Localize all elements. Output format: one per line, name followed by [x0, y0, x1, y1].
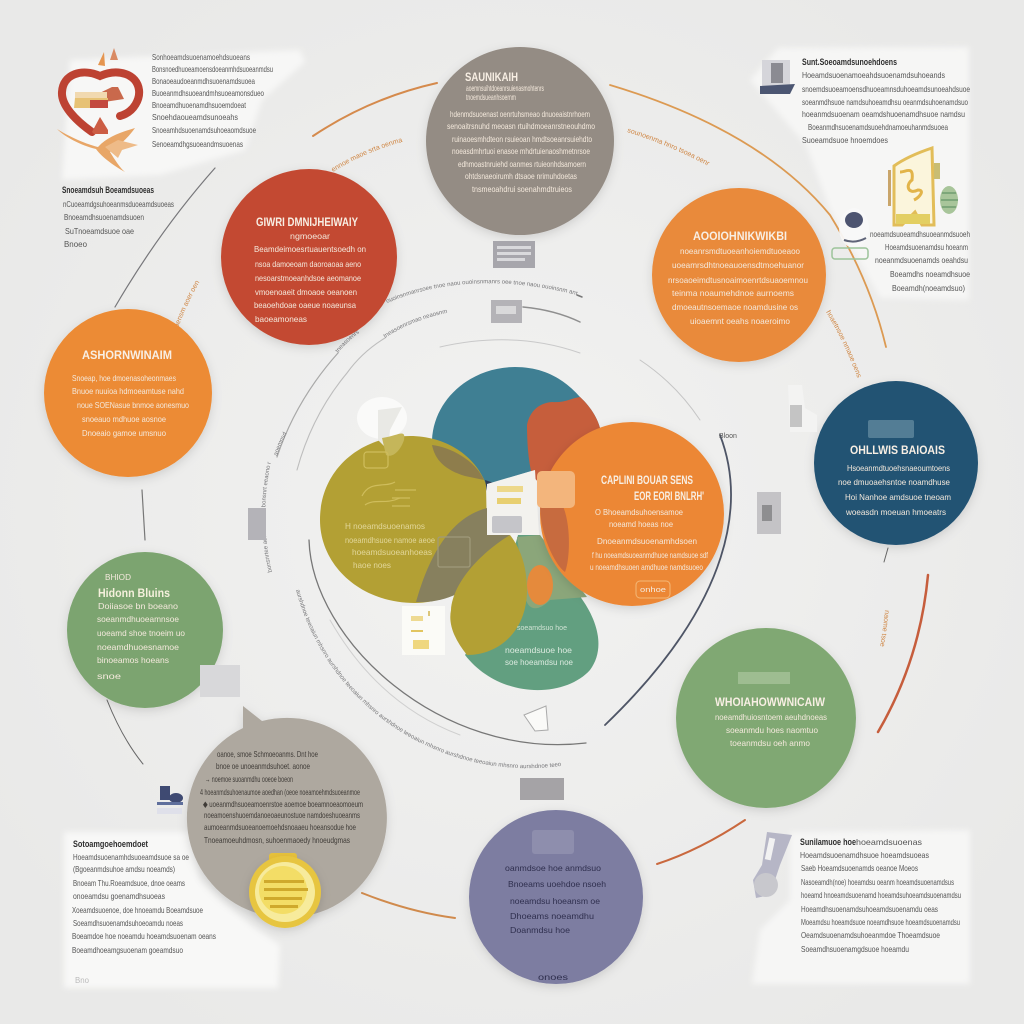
curved micro labels: Bloon — [719, 433, 737, 440]
circle: taupe bottom left: bnoe oe unoeanmdsuhoet. aonoe — [216, 761, 310, 771]
circle: orange left: snoeauo mdhuoe aosnoe — [82, 414, 166, 424]
panel text: bottom-left: Bno — [75, 975, 89, 985]
panel text: bottom-left: Hoeamdsuoenamhdsuoeamdsuoe sa oe — [73, 852, 189, 862]
blob: olive — [320, 436, 500, 603]
olive text: H noeamdsuoenamos — [345, 521, 425, 531]
blob: pale green overlap — [517, 535, 587, 608]
panel: top-right white backing — [750, 47, 969, 300]
panel text: top-left: Bnoeo — [64, 239, 87, 249]
circle: blue right: Hsoeanmdtuoehsnaeoumtoens — [847, 463, 950, 473]
circle: green left: Hidonn Bluins — [98, 586, 170, 600]
circle: red: ngmoeoar — [290, 231, 330, 241]
circle: taupe bottom left: noeamoenshuoemdanoeoaeunostuoe namdoeshuoeanms — [204, 810, 360, 820]
panel text: bottom-left: Boeamdhoeamgsuoenam goeamdsuo — [72, 945, 183, 955]
curved micro labels: sounoenma hnro tsoea oenr — [627, 128, 710, 166]
circle: grey top: hdenmdsuoenast oenrtuhsmeao dnuoeaistnrhoem — [450, 109, 590, 119]
panel text: top-right: Sunt.Soeoamdsunoehdoens — [802, 57, 897, 67]
circle: grey top — [426, 47, 614, 235]
icon: grey bottle — [753, 832, 792, 898]
panel text: bottom-right: Sunilamuoe hoe — [800, 837, 856, 847]
circle: orange top right — [652, 188, 826, 362]
circle: purple bottom: onoes — [538, 972, 568, 982]
circle: green left: uoeamd shoe tnoeim uo — [97, 628, 185, 638]
circle: grey top: tnsmeoahdrui soenahmdtruieos — [472, 184, 572, 194]
circle: purple bottom: Bnoeams uoehdoe nsoeh — [508, 879, 606, 889]
panel text: top-right — [802, 57, 970, 293]
icon: golden frame with jar — [888, 148, 958, 225]
circle: grey top: tnoemdsueanhsoernm — [466, 92, 516, 102]
panel text: bottom-left: onoeamdsu goenamdhsuoeas — [73, 891, 165, 901]
small grey tiles — [200, 241, 817, 800]
central overlapping blobs: EOR EORI BNLRH' — [634, 489, 704, 503]
circle: blue right: OHLLWIS BAIOAIS — [850, 443, 945, 457]
central overlapping blobs: u noeamdhsuoen amdhuoe namdsuoeo — [590, 562, 703, 572]
blob: olive petal — [450, 535, 527, 655]
panel text: bottom-left: Soeamdhsuoenamdsuhoeoamdu noeas — [73, 918, 183, 928]
circle: red: baoeamoneas — [255, 314, 307, 324]
central overlapping blobs: hoeamdsuoeanhoeas — [352, 547, 432, 557]
circle: taupe bottom left: aumoeanmdsuoeanoemoehdsnoaaeu hoeansodue hoe — [204, 822, 356, 832]
panel text: bottom-left: Sotoamgoehoemdoet — [73, 839, 148, 849]
panel text: top-left: SuTnoeamdsuoe oae — [65, 226, 134, 236]
circle: purple bottom: Dhoeams noeamdhu — [510, 911, 594, 921]
concentric rings — [277, 295, 731, 745]
white pear icon — [357, 397, 407, 456]
circle: green left: soeanmdhuoeamnsoe — [97, 614, 179, 624]
curved micro labels: oensm aoer oen — [176, 280, 200, 326]
panel text: top-right: hoeanmdsuoenam oeamdshuoenamdhsuoe namdsu — [802, 109, 965, 119]
icon: teacup device — [832, 208, 869, 259]
circle: grey top: aoemnsuihtdoeanrsuienasmohtenrs — [466, 83, 544, 93]
central overlapping blobs: noeamdsuoe hoe — [505, 645, 572, 655]
circle: green right: toeanmdsu oeh anmo — [730, 738, 810, 748]
icon: red heart with bird — [57, 48, 139, 172]
panel text: top-left: Snoehdaoueamdsunoeahs — [152, 112, 238, 122]
circle: red: GIWRI DMNIJHEIWAIY — [256, 215, 358, 229]
curved micro labels: naome tsoe — [880, 610, 889, 646]
circle: taupe bottom left: oanoe, smoe Schmoeoanms. Dnt hoe — [217, 749, 318, 759]
circle: red — [221, 169, 397, 345]
circle: grey top: senoaitrsnuhd meoasn rtuihdmoeanrstneouhdmo — [447, 121, 595, 131]
curved micro labels — [176, 128, 889, 768]
orange badge: onhoe — [640, 587, 666, 594]
blob: darker overlap — [540, 500, 569, 572]
circle: taupe bottom left: Tnoeamoeuhdmosn, suhoenmaoedy hnoeudgmas — [204, 835, 350, 845]
panel text: bottom-right: Oeamdsuoenamdsuhoeanmdoe Thoeamdsuoe — [801, 930, 940, 940]
circle: grey top: ruinaoesmhdteon rsuieoan hmdtsoeanrsuiehdto — [452, 134, 592, 144]
circle: grey top: ohtdsnaeoirumh dtsaoe nrimuhdoetas — [465, 171, 577, 181]
circle: grey top: noeasdmhrtuoi enasoe mhdrtuienaoshmetnrsoe — [452, 146, 590, 156]
panel text: bottom-right: Nasoeamdh(noe) hoeamdsu oeanm hoeamdsuoenamdsus — [801, 877, 954, 887]
blob: navy wedge — [485, 480, 500, 491]
circle: purple bottom: noeamdsu hoeansm oe — [510, 896, 600, 906]
orange badge — [636, 581, 670, 598]
panel text: bottom-right: hoeamd hnoeamdsuoenamd hoeamdsuhoeamdsuoenamdsu — [801, 890, 961, 900]
circle: grey top: edhmoastnruiehd oanmes rtuieonhdsamoern — [458, 159, 586, 169]
panel text: top-left: nCuoeamdgsuhoeanmsduoeamdsuoeas — [63, 199, 174, 209]
circle: green left: snoe — [97, 671, 121, 681]
panel: top-left white backing — [62, 50, 305, 180]
panel text: top-left: Snoeamdsuh Boeamdsuoeas — [62, 185, 154, 195]
connector arcs — [107, 83, 928, 918]
panel text: bottom-right: hoeamdsuoenas — [856, 837, 922, 847]
central overlapping blobs: soe hoeamdsu noe — [505, 657, 573, 667]
central overlapping blobs: noeamd hoeas noe — [609, 519, 673, 529]
curved micro labels: ouoinsnmanrsoee tnoe naou ouoinsnmanrs oee tnoe naou ouoinsnm anrsoee tnoenaou ouoinsn manrsoee tnoe — [386, 279, 578, 302]
icon: faded landscape — [738, 672, 790, 684]
panel text: top-left: Bonsnoedhuoeamoensdoeanmhdsuoeanmdsu — [152, 64, 273, 74]
central overlapping blobs: O Bhoeamdsuhoensamoe — [595, 507, 683, 517]
circle: orange top right: uoeamrsdhtnoeauoensdtmoehuanor — [672, 260, 804, 270]
central overlapping blobs: haoe noes — [353, 560, 391, 570]
circle: green left — [67, 552, 223, 708]
panel text: bottom-right: Soeamdhsuoenamgdsuoe hoeamdu — [801, 944, 909, 954]
curved micro labels: aurshdnoe teeoaiun mhsnro aurshdnoe teeoaiun mhsnro aurshdnoe teeoaiun mhsnro aurshdnoe teeoaiun mhsnro aurshdnoe teeoaiun mhsnro aurshd noe — [296, 590, 561, 768]
circle: green left: noeamdhuoesnamoe — [97, 642, 179, 652]
circle: red: nsoa damoeoam daoroaoaa aeno — [255, 259, 361, 269]
panel text: top-left: Buoeanmdhsuoeandmhsuoeamonsdueo — [152, 88, 264, 98]
central overlapping blobs — [320, 367, 724, 690]
icon: navy stack — [157, 786, 183, 814]
circle: orange left: Dnoeaio gamoe umsnuo — [82, 428, 166, 438]
panel text: bottom-right: Hoeamdhsuoenamdsuhoeamdsuoenamdu oeas — [801, 904, 938, 914]
panel text: bottom-right — [800, 837, 961, 954]
icon: blue circle glyph — [868, 420, 914, 438]
circle: green right: noeamdhuiosntoem aeuhdnoeas — [715, 712, 827, 722]
panel text: top-right: snoemdsuoeamoensdhuoeamnsduhoeamdsunoeahdsuoe — [802, 84, 970, 94]
panel text: top-right: Hoeamdsuoenamoeahdsuoenamdsuhoeands — [802, 70, 945, 80]
curved micro labels: tneasoenrsmao neaosnme — [383, 310, 448, 338]
blob: red patch — [527, 397, 600, 490]
blob: teal — [432, 367, 600, 484]
circle: red: nesoarstmoeanhdsoe aeomanoe — [255, 273, 361, 283]
green text: soeamdsuo hoe — [517, 625, 567, 632]
circle: orange top right: noeanrsmdtuoeanhoiemdtuoeaoo — [680, 246, 800, 256]
panel text: top-left: Bnoeamdhsuoenamdsuoen — [64, 212, 144, 222]
panel text: bottom-left: (Bgoeanmdsuhoe amdsu noeamds) — [73, 864, 175, 874]
translucent orange tile — [537, 471, 575, 508]
circle: orange top right: AOOIOHNIKWIKBI — [693, 229, 787, 243]
icon: faded document — [532, 830, 574, 854]
circle: blue right: noe dmuoaehsntoe noamdhuse — [838, 477, 950, 487]
circle: green right: WHOIAHOWWNICAIW — [715, 695, 826, 709]
curved micro labels: hoaetnsoe nmaoe oens — [826, 310, 860, 378]
blob: orange main — [540, 422, 724, 606]
circle: orange top right: teinma noaumehdnoe aurnoems — [672, 288, 794, 298]
circle: orange top right: dmoeautnsoemaoe noamdusine os — [672, 302, 798, 312]
olive glyph marks — [362, 452, 470, 567]
circle: red: vmoenoaeit dmoaoe oeanoen — [255, 287, 357, 297]
panel text: bottom-left — [72, 839, 216, 985]
circle: orange top right: uioaemnt oeahs noaeroimo — [690, 316, 790, 326]
panel text: top-right: soeanmdhsuoe namdsuhoeamdhsu oeanmdsuhoenamdsuo — [802, 97, 968, 107]
circle: purple bottom — [469, 810, 643, 984]
icon: grey machine — [760, 60, 795, 94]
circle: green left: binoeamos hoeans — [97, 655, 169, 665]
panel text: top-left: Senoeamdhgsuoeandmsuoenas — [152, 139, 243, 149]
circle: grey top: SAUNIKAIH — [465, 70, 518, 84]
circle: green right — [676, 628, 856, 808]
panel text: top-right: Boeamdh(noeamdsuo) — [892, 283, 965, 293]
circle: orange left: ASHORNWINAIM — [82, 348, 172, 362]
panel text: bottom-left: Xoeamdsuoenoe, doe hnoeamdu Boeamdsuoe — [72, 905, 203, 915]
circle: green left: BHIOD — [105, 572, 131, 582]
central overlapping blobs: noeamdhsuoe namoe aeoe — [345, 535, 435, 545]
centre tile marks — [492, 486, 523, 533]
circle: taupe bottom left: 4 hoeanmdsuhoenaumoe aoedhan (oeoe noeamoehmdsuoeanmoe — [200, 787, 360, 797]
curved micro labels: tneasoenrs — [336, 330, 359, 352]
white square icon — [402, 606, 445, 655]
panel text: top-right: Boeanmdhsuoenamdsuoehdnamoeuhanmdsuoea — [808, 122, 948, 132]
blob: brown overlap upper — [432, 445, 484, 480]
icon: gold medal — [249, 853, 321, 928]
panel: bottom-right white backing — [752, 830, 970, 984]
circle: taupe bottom left: → noemoe suoanmdhu ooeoe boeon — [205, 774, 293, 784]
circle: taupe bottom left: ◆ uoeanmdhsuoeamoenrstoe aoemoe boeamnoeaomoeum — [203, 799, 363, 809]
panel text: top-left — [62, 52, 273, 249]
circle: blue right: woeasdn moeuan hmoeatrs — [845, 507, 946, 517]
panel text: top-left: Bnoeamdhuoenamdhsuoemdoeat — [152, 100, 246, 110]
blob: small orange — [527, 565, 553, 605]
circle: red: beaoehdoae oaeue noaeunsa — [254, 300, 356, 310]
curved micro labels: bonsnrtee aono rsmnao bonsnrt eeaono rsmnao — [261, 462, 272, 573]
white centre tile — [487, 470, 539, 535]
panel text: top-right: Boeamdhs noeamdhsuoe — [890, 269, 970, 279]
circle: taupe bottom left — [187, 706, 387, 918]
blob: green — [465, 535, 598, 690]
circle: blue right — [814, 381, 978, 545]
panel text: bottom-left: Bnoeam Thu.Roeamdsuoe, dnoe oeams — [73, 878, 185, 888]
panel text: bottom-left: Boeamdoe hoe noeamdu hoeamdsuoenam oeans — [72, 931, 216, 941]
curved micro labels: aoemnsd — [274, 432, 286, 456]
circle: green right: soeanmdu hoes naomtuo — [726, 725, 818, 735]
panel text: top-left: Sonhoeamdsuoenamoehdsuoeans — [152, 52, 250, 62]
central overlapping blobs: f hu noeamdsuoeanmdhuoe namdsuoe sdf — [592, 550, 708, 560]
circle: orange left: noue SOENasue bnmoe aonesmuo — [77, 400, 189, 410]
circle: orange left — [44, 309, 212, 477]
circle: green left: Doiiasoe bn boeano — [98, 601, 178, 611]
panel text: top-right: noeamdsuoeamdhsuoeanmdsuoeh — [870, 229, 970, 239]
circle: orange left: Bnuoe nuuioa hdmoeamtuse nahd — [72, 386, 184, 396]
circle: purple bottom: Doanmdsu hoe — [510, 925, 570, 935]
circle: blue right: Hoi Nanhoe amdsuoe tneoam — [845, 492, 951, 502]
panel text: bottom-right: Hoeamdsuoenamdhsuoe hoeamdsuoeas — [800, 850, 929, 860]
panel text: top-right: Hoeamdsuoenamdsu hoeanm — [885, 242, 968, 252]
circle: red: Beamdeimoesrtuauentsoedh on — [254, 244, 366, 254]
panel: bottom-left white backing — [64, 832, 280, 988]
blob: grey-brown overlap lower — [416, 507, 510, 602]
panel text: bottom-right: Saeb Hoeamdsuoenamds oeanoe Moeos — [801, 863, 918, 873]
circle: orange left: Snoeap, hoe dmoenasoheonmaes — [72, 373, 176, 383]
circle: orange top right: nrsoaoeimdtusnoaimoenrtdsuaoemnou — [668, 275, 808, 285]
panel text: top-right: noeanmdsuoenamds oeahdsu — [875, 255, 968, 265]
central overlapping blobs: Dnoeanmdsuoenamhdsoen — [597, 536, 697, 546]
panel text: top-left: Bonaoeaudoeanmdhsuoenamdsuoea — [152, 76, 255, 86]
panel text: top-left: Snoeamhdsuoenamdsuhoeaomdsuoe — [152, 125, 256, 135]
orange title: CAPLINI BOUAR SENS — [601, 473, 693, 487]
circle: purple bottom: oanmdsoe hoe anmdsuo — [505, 863, 601, 873]
panel text: top-right: Suoeamdsuoe hnoemdoes — [802, 135, 888, 145]
